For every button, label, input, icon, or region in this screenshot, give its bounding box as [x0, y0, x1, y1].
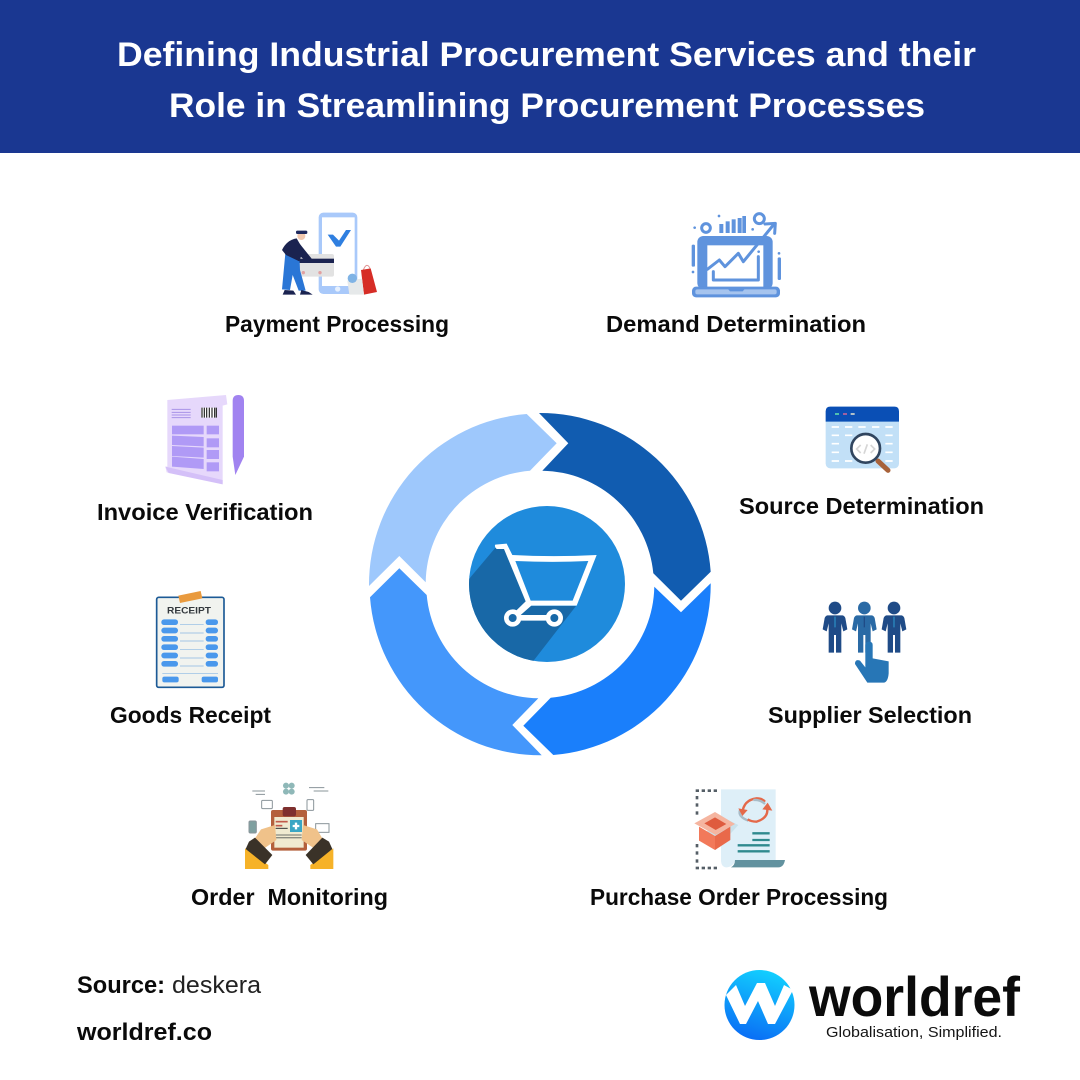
- source credit: Source:: [77, 972, 165, 999]
- icon: goods receipt: [157, 591, 224, 687]
- label: Demand Determination: Demand Determination: [606, 311, 866, 337]
- label: Supplier Selection: Supplier Selection: [768, 702, 972, 728]
- icon: order monitoring clipboard: [245, 783, 333, 869]
- source credit: deskera: [172, 972, 262, 999]
- website: worldref.co: [76, 1019, 212, 1046]
- worldref logo: Globalisation, Simplified.: [826, 1024, 1002, 1041]
- cycle ring diagram: [369, 413, 711, 755]
- icon: invoice and pencil: [165, 395, 244, 484]
- icon: supplier selection: [823, 602, 906, 683]
- label: Order Monitoring: Order Monitoring: [191, 884, 388, 910]
- icon: goods receipt: RECEIPT: [167, 605, 211, 615]
- worldref logo: worldref: [808, 965, 1020, 1028]
- icon: shopping cart badge: [469, 506, 625, 662]
- icon: payment on phone: [282, 213, 377, 295]
- icon: demand chart on laptop: [692, 214, 781, 297]
- label: Source Determination: Source Determination: [739, 493, 984, 519]
- arrow segment: dark blue: [539, 413, 711, 601]
- arrow segment: light blue: [369, 414, 557, 586]
- source credit: [77, 972, 262, 999]
- title banner: Role in Streamlining Procurement Processes: [169, 87, 925, 125]
- label: Invoice Verification: Invoice Verification: [97, 499, 313, 525]
- title banner: [0, 0, 1080, 153]
- worldref logo: [724, 965, 1020, 1041]
- label: Purchase Order Processing: Purchase Order Processing: [590, 884, 888, 910]
- arrow segment: bright blue: [523, 583, 711, 755]
- label: Goods Receipt: Goods Receipt: [110, 702, 271, 728]
- arrow segment: medium blue: [370, 568, 542, 755]
- icon: purchase order document: [694, 789, 785, 869]
- title banner: Defining Industrial Procurement Services and their: [117, 36, 976, 74]
- icon: source code search: [826, 407, 899, 470]
- label: Payment Processing: Payment Processing: [225, 311, 449, 337]
